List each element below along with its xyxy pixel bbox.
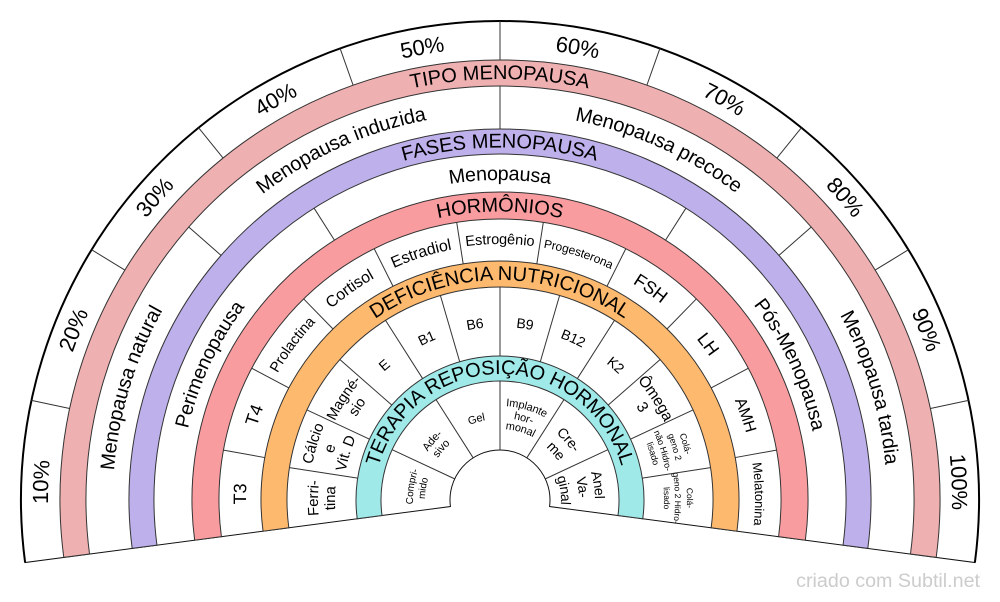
label: vitaminas e minerais: B12	[559, 326, 588, 351]
label: comprimido	[406, 470, 428, 504]
label: colageno 2 nao hidrolisado: geno 2	[666, 432, 684, 461]
percentage scale: 90%	[913, 308, 940, 352]
label: colageno 2 nao hidrolisado: lisado	[645, 441, 661, 466]
label: ferritina: tina	[324, 486, 336, 510]
label: vitaminas e minerais: B9	[516, 315, 535, 333]
heading: terapia reposicao hormonal: TERAPIA REPOSIÇÃO HORMONAL	[366, 358, 632, 466]
label: anel vaginal: ginal	[554, 473, 574, 505]
ring: hormonios: Estradiol	[390, 238, 451, 268]
percentage scale: 30%	[136, 178, 173, 216]
ring: fases da menopausa: Pós-Menopausa	[754, 298, 822, 432]
percentage scale: 70%	[705, 82, 744, 116]
ring: tipos de menopausa	[100, 107, 898, 469]
label: ferritina	[308, 480, 336, 515]
label: implante hormonal	[506, 398, 546, 437]
ring: fases da menopausa: Perimenopausa	[175, 303, 245, 428]
label: anel vaginal: Va-	[573, 475, 592, 498]
label: ferritina: Ferri-	[308, 480, 319, 515]
label: adesivo	[423, 432, 449, 458]
band: fases menopausa	[129, 129, 871, 548]
label: omega 3: Ômega	[635, 372, 677, 424]
label: vitaminas e minerais: B1	[415, 327, 438, 349]
label: creme: me	[544, 438, 569, 463]
label: calcio e vit d: Vit. D	[336, 436, 354, 470]
label: colageno 2 hidrolisado: lisado	[662, 487, 672, 510]
heading: deficiencia nutricional: DEFICIÊNCIA NUTRICIONAL	[369, 266, 626, 318]
label: colageno 2 hidrolisado: geno 2 Hidro-	[671, 472, 683, 525]
ring: tipos de menopausa: Menopausa natural	[100, 304, 162, 469]
band: deficiencia nutricional	[261, 261, 739, 531]
label: implante hormonal: hor-	[513, 410, 535, 427]
label: gel: Gel	[467, 411, 486, 428]
label: comprimido: Compri-	[404, 467, 421, 504]
watermark: criado com Subtil.net	[796, 570, 981, 592]
ring: hormonios: Prolactina	[270, 318, 316, 372]
label: implante hormonal: monal	[505, 420, 537, 440]
band: tipo menopausa	[60, 60, 940, 557]
ring: terapia hormonal	[406, 398, 606, 504]
label: adesivo: Ade-	[420, 428, 445, 453]
label: calcio e vit d: e	[326, 445, 335, 452]
heading: fases menopausa: FASES MENOPAUSA	[402, 134, 596, 161]
ring: fases da menopausa: Menopausa	[449, 168, 550, 184]
ring: hormonios: LH	[697, 332, 720, 356]
label: calcio e vit d	[303, 424, 354, 470]
label: colageno 2 nao hidrolisado	[646, 430, 691, 471]
percentage scale: 10%	[32, 460, 50, 502]
ring: hormonios: AMH	[734, 400, 756, 432]
label: omega 3: 3	[633, 399, 652, 415]
label: anel vaginal: Anel	[588, 469, 608, 499]
ring: hormonios: Progesterona	[544, 240, 612, 270]
label: creme: Cre-	[554, 424, 584, 455]
ring: tipos de menopausa: Menopausa precoce	[576, 107, 740, 192]
percentage scale: 100%	[950, 456, 968, 510]
heading: tipo menopausa: TIPO MENOPAUSA	[409, 65, 588, 88]
label: creme	[546, 428, 576, 460]
ring: hormonios: Melatonina	[752, 462, 764, 526]
ring: hormonios: T4	[245, 405, 263, 424]
label: magnesio: Magné-	[326, 378, 358, 420]
percentage scale: 50%	[400, 36, 444, 58]
label: anel vaginal	[554, 472, 606, 504]
label: vitaminas e minerais	[378, 318, 624, 374]
label: adesivo: sivo	[430, 437, 452, 460]
label: comprimido: mido	[416, 476, 431, 499]
label: vitaminas e minerais: B6	[465, 315, 485, 333]
percentage scale: 40%	[258, 84, 296, 114]
percentage scale: 60%	[556, 36, 598, 58]
ring: hormonios: T3	[234, 484, 246, 504]
ring: tipos de menopausa: Menopausa tardia	[840, 310, 898, 465]
ring: fases da menopausa	[175, 168, 822, 432]
label: magnesio: sio	[350, 399, 365, 416]
label: colageno 2 hidrolisado	[664, 472, 694, 524]
ring: hormonios	[234, 234, 764, 526]
label: colageno 2 hidrolisado: Colá-	[685, 488, 695, 508]
ring: deficiencia nutricional	[303, 318, 694, 524]
label: vitaminas e minerais: K2	[604, 353, 628, 377]
label: vitaminas e minerais: E	[375, 356, 393, 374]
percentage scale	[32, 36, 968, 510]
ring: hormonios: Cortisol	[326, 268, 374, 306]
percentage scale: 20%	[60, 310, 88, 352]
percentage scale: 80%	[827, 178, 863, 217]
label: calcio e vit d: Cálcio	[303, 424, 323, 463]
ring: hormonios: FSH	[634, 274, 668, 303]
ring: tipos de menopausa: Menopausa induzida	[256, 108, 427, 194]
ring: hormonios: Estrogênio	[466, 234, 534, 247]
label: colageno 2 nao hidrolisado: não Hidro-	[652, 429, 673, 472]
label: colageno 2 nao hidrolisado: Colá-	[678, 432, 693, 455]
band: terapia reposicao hormonal	[356, 356, 644, 519]
band: hormonios	[192, 192, 808, 540]
label: implante hormonal: Implante	[506, 397, 549, 420]
heading: hormonios: HORMÔNIOS	[436, 194, 563, 218]
